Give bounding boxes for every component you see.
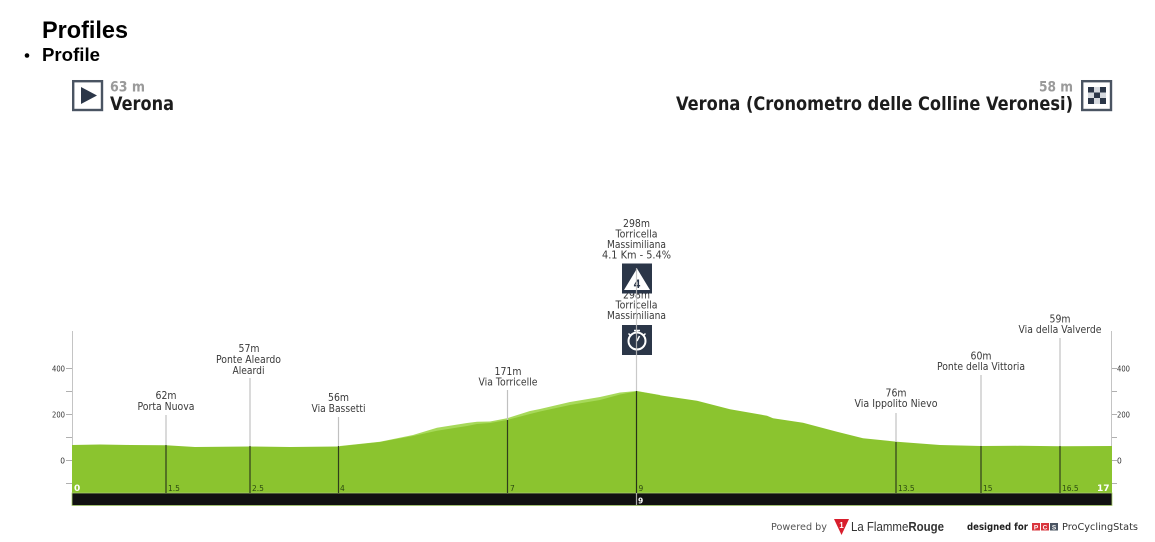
icon: PCS logo: P — [1034, 524, 1039, 532]
footer credit: La Flamme Rouge: La FlammeRouge — [851, 519, 944, 534]
marker: Porta Nuova: Porta Nuova — [138, 401, 194, 413]
heading: Profiles: Profiles — [42, 17, 128, 44]
finish name: Verona (Cronometro delle Colline Veronesi) — [676, 93, 1073, 115]
marker: Torricella Massimiliana intermediate time label: Massimiliana — [607, 310, 666, 322]
left axis — [52, 331, 72, 505]
distance band — [72, 493, 1112, 506]
footer credit: ProCyclingStats — [967, 522, 1138, 533]
marker: Torricella Massimiliana climb label: Torricella — [615, 228, 658, 240]
left axis: 200 — [52, 410, 65, 420]
marker: Ponte Aleardo Aleardi: Aleardi — [232, 365, 264, 377]
icon: PCS logo: S — [1052, 524, 1057, 532]
marker: Via Ippolito Nievo: Via Ippolito Nievo — [854, 398, 938, 410]
marker: Ponte della Vittoria: 60m — [970, 350, 992, 362]
marker: Via Torricelle: 7 — [510, 484, 515, 493]
start name: Verona — [110, 93, 174, 115]
marker: Torricella Massimiliana climb label — [602, 218, 671, 262]
marker: Via Bassetti — [312, 392, 366, 493]
profile highlight: climb — [340, 391, 660, 450]
icon: finish checkered flag — [1082, 81, 1111, 110]
finish elevation: 58 m — [1039, 80, 1073, 96]
icon: category 4 climb: 4 — [634, 277, 641, 292]
marker: Via Ippolito Nievo: 76m — [886, 388, 906, 400]
marker: Ponte Aleardo Aleardi: 2.5 — [252, 484, 264, 493]
marker: Via Torricelle — [478, 366, 538, 493]
marker: Torricella Massimiliana intermediate time label: Torricella — [615, 300, 658, 312]
icon: stopwatch — [622, 325, 652, 355]
marker: Porta Nuova — [138, 390, 194, 493]
marker: Porta Nuova: 1.5 — [168, 484, 180, 493]
left axis: 400 — [52, 364, 65, 374]
marker: Via Bassetti: 4 — [340, 484, 345, 493]
marker: Via Bassetti: 56m — [328, 392, 349, 404]
icon: La Flamme Rouge logo — [834, 519, 849, 535]
profile area — [72, 391, 1112, 494]
marker: Ponte Aleardo Aleardi — [216, 343, 281, 493]
footer credit: ProCyclingStats: ProCyclingStats — [1062, 522, 1138, 533]
marker: Via della Valverde — [1018, 314, 1102, 493]
icon: PCS logo: C — [1043, 524, 1048, 532]
chart: stage elevation profile — [52, 218, 1130, 506]
marker: Porta Nuova: 62m — [156, 390, 176, 402]
marker: Via della Valverde: Via della Valverde — [1018, 324, 1102, 336]
right axis: 0 — [1117, 456, 1122, 466]
marker: Torricella Massimiliana climb label: Massimiliana — [607, 239, 666, 251]
marker: Ponte Aleardo Aleardi: Ponte Aleardo — [216, 354, 281, 366]
marker: Via della Valverde: 59m — [1050, 314, 1070, 326]
marker line: Torricella Massimiliana: 9 — [638, 484, 644, 493]
marker: Torricella Massimiliana intermediate time label: 298m — [623, 290, 650, 302]
marker: Via Ippolito Nievo — [854, 388, 938, 493]
left axis: 0 — [60, 456, 65, 466]
marker: Via Torricelle: 171m — [494, 366, 522, 378]
icon: category 4 climb — [622, 264, 652, 294]
footer credit: ProCyclingStats: designed for — [967, 522, 1028, 533]
marker line: Torricella Massimiliana: 9 — [638, 496, 643, 506]
marker: Torricella Massimiliana climb label: 298m — [623, 218, 650, 230]
finish distance label: 17 — [1097, 484, 1110, 494]
marker: Via Torricelle: Via Torricelle — [478, 376, 538, 388]
icon: PCS logo — [1032, 523, 1058, 532]
marker: Torricella Massimiliana intermediate time label — [607, 290, 666, 322]
marker: Ponte della Vittoria: Ponte della Vittoria — [937, 361, 1025, 373]
right axis — [1112, 331, 1130, 505]
marker: Ponte Aleardo Aleardi: 57m — [238, 343, 260, 355]
marker: Ponte della Vittoria — [937, 350, 1025, 493]
marker: Ponte della Vittoria: 15 — [983, 484, 993, 493]
start block: Verona — [73, 80, 174, 115]
footer credit: La Flamme Rouge: Powered by — [771, 522, 827, 533]
finish block: Verona (Cronometro delle Colline Veronesi) — [676, 80, 1111, 115]
list item: Profile: Profile — [42, 45, 100, 65]
start distance label: 0 — [74, 484, 80, 494]
marker: Via della Valverde: 16.5 — [1062, 484, 1079, 493]
icon: start play — [73, 81, 102, 110]
marker line: Torricella Massimiliana — [636, 268, 644, 506]
icon: La Flamme Rouge logo: 1 — [839, 521, 844, 530]
right axis: 400 — [1117, 364, 1130, 374]
marker: Via Ippolito Nievo: 13.5 — [898, 484, 915, 493]
footer credit: La Flamme Rouge — [771, 519, 944, 535]
marker: Torricella Massimiliana climb label: 4.1 Km - 5.4% — [602, 250, 671, 262]
marker: Via Bassetti: Via Bassetti — [312, 403, 366, 415]
start elevation: 63 m — [110, 80, 145, 96]
right axis: 200 — [1117, 410, 1130, 420]
